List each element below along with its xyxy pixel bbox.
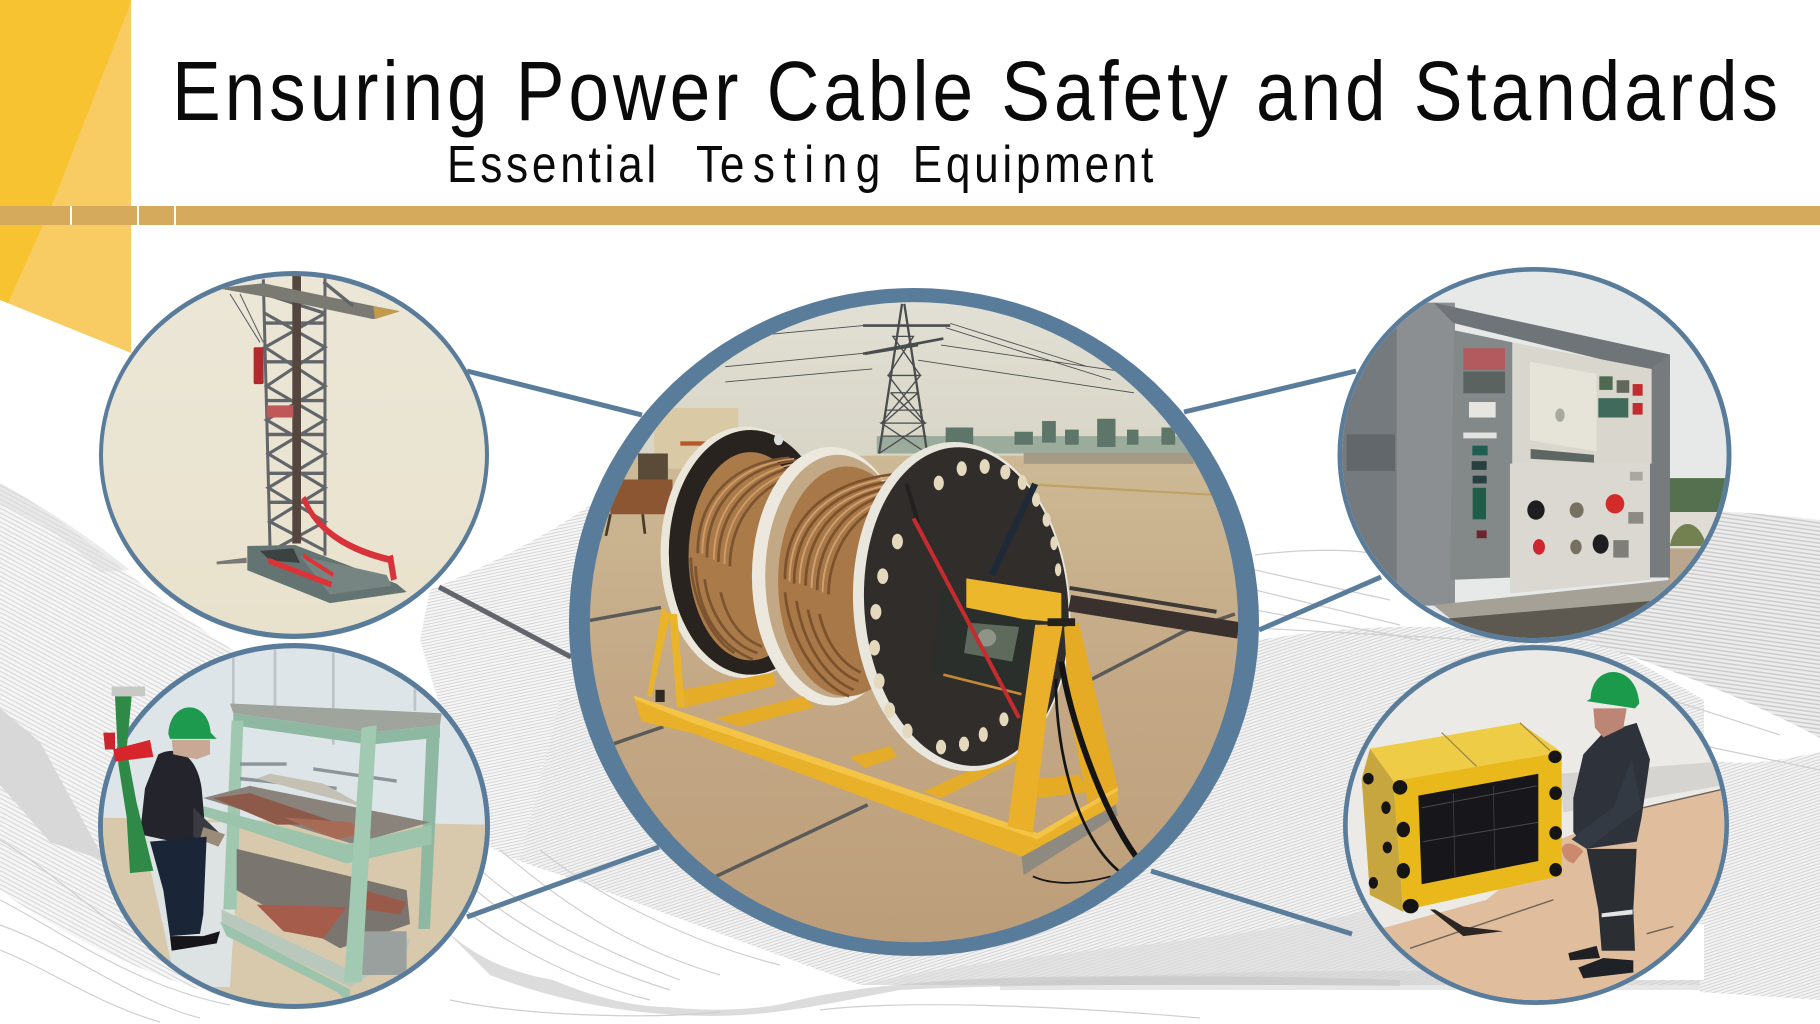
divider bar (0, 206, 1820, 225)
rack frame (223, 704, 442, 929)
front cable coil (778, 466, 892, 698)
long base rail (633, 695, 1118, 875)
subtitle: Equipment (913, 136, 1157, 194)
rear flange (660, 426, 802, 678)
front flange with holes (852, 442, 1070, 772)
red cable (303, 498, 393, 561)
subtitle: esting (720, 136, 889, 194)
green machine at left edge (103, 687, 153, 873)
horizon trees and fence (877, 419, 1194, 464)
tower jib (217, 282, 400, 319)
sky and ground (590, 302, 1238, 942)
cabinet plinth (1434, 580, 1670, 638)
red cylinder (254, 347, 264, 384)
technician (140, 707, 225, 951)
connector lines (439, 371, 1381, 934)
shelf with copper parts (200, 774, 432, 863)
subtitle: Essential (447, 136, 660, 194)
left A-frame stand (647, 607, 685, 707)
test base (217, 545, 407, 603)
photo: central cable drum on yellow stand (560, 280, 1280, 976)
base frame rear crossbars (682, 672, 1019, 798)
header accent: yellow ribbon (0, 0, 131, 353)
technician (1562, 672, 1650, 978)
red test rod (907, 484, 1019, 718)
white control panel (1510, 342, 1652, 593)
background mesh waves (0, 483, 1820, 1022)
white patch behind lower-right photo (1500, 924, 1704, 980)
yellow test box (1362, 723, 1562, 936)
left green-grey door (1450, 330, 1512, 580)
cabinet body (1333, 303, 1670, 609)
right A-frame stand (1008, 618, 1118, 833)
photo: technician with yellow testing box (1343, 645, 1729, 1005)
rack centre column (344, 725, 377, 982)
black hoses (1033, 662, 1136, 883)
hub mechanism (943, 622, 1022, 696)
subtitle: T (696, 136, 723, 194)
photo: switchgear cabinet (1320, 260, 1740, 648)
lower shelf (220, 849, 410, 1004)
middle flange (752, 447, 884, 706)
photo: lattice tower test rig (99, 271, 489, 639)
rear cable coil (688, 452, 798, 660)
title: Ensuring Power Cable Safety and Standards (172, 44, 1778, 138)
tower mast (230, 275, 325, 556)
beige building and brown cabinet (606, 408, 738, 536)
dark pipe (1070, 588, 1239, 630)
curb and floor (1380, 762, 1733, 1016)
photo: technician at green component rack (98, 643, 490, 1009)
yellow top plate (966, 578, 1061, 623)
trees and ground (1668, 478, 1725, 586)
transmission tower (725, 304, 1134, 453)
